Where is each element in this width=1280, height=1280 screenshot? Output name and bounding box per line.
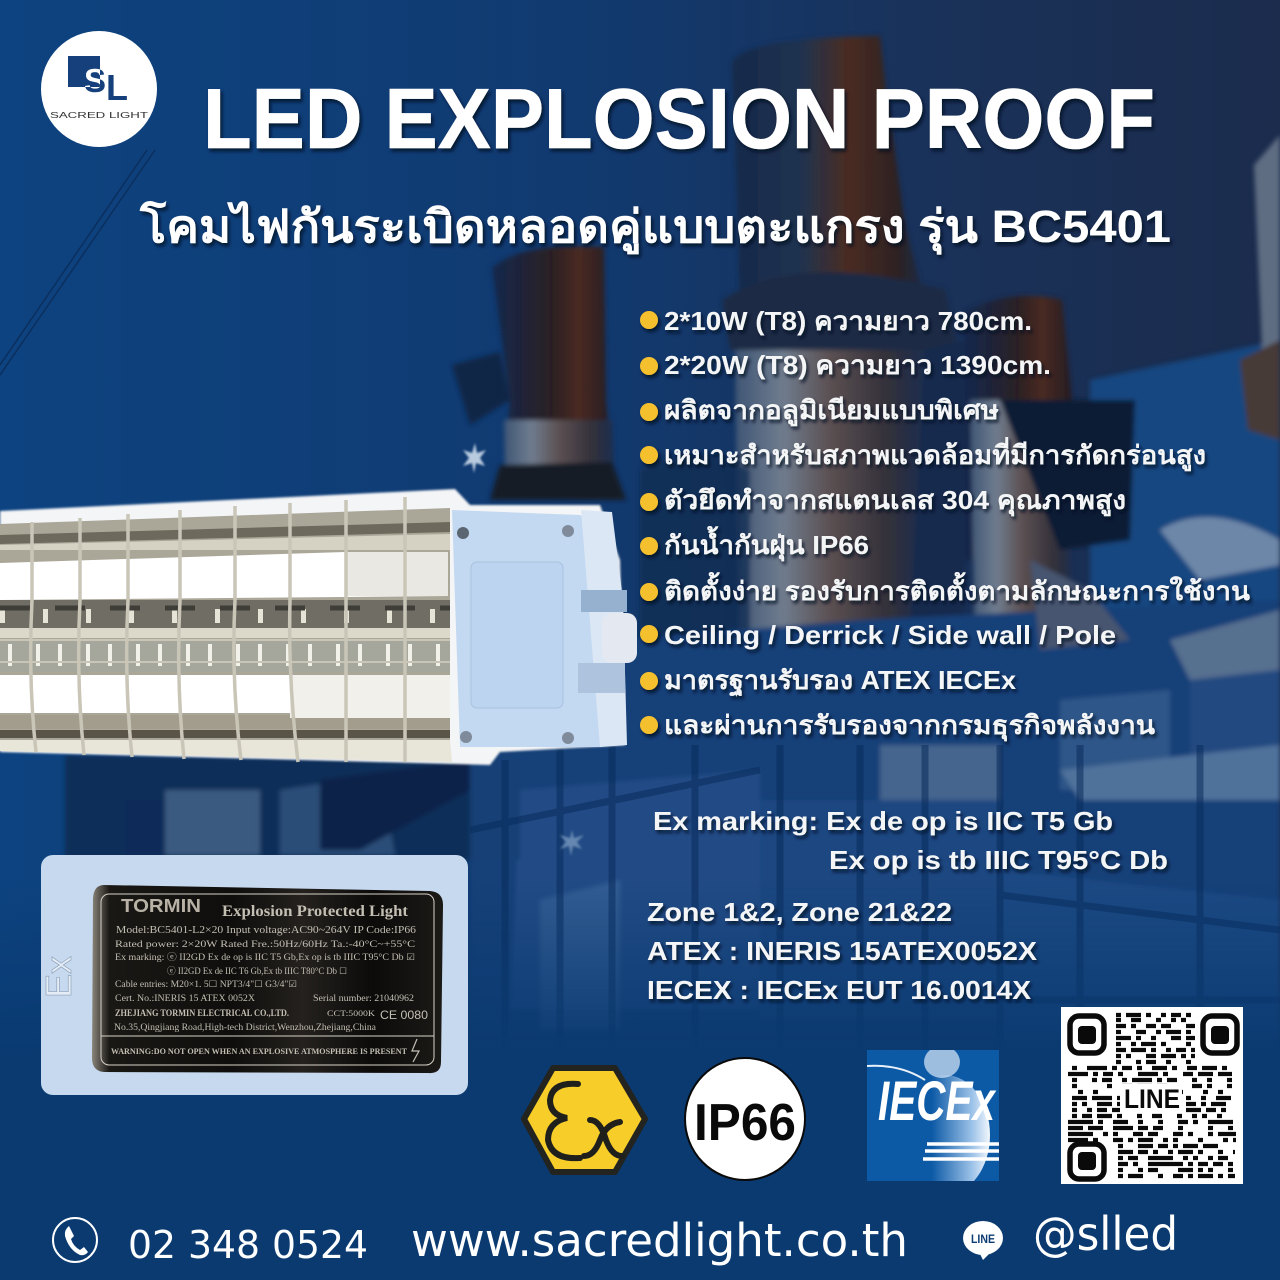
lamp body xyxy=(0,489,625,765)
panel: nameplate photo: Rated power: 2×20W Rated Fre.:50Hz/60Hz Ta.:-40°C~+55°C xyxy=(115,939,415,950)
icon: LINE bubble: LINE xyxy=(971,1232,995,1246)
certification text block xyxy=(647,897,1038,1005)
panel: nameplate photo: Ex marking: ⓔ II2GD Ex de op is IIC T5 Gb,Ex op is tb IIIC T95°C Db ☑ xyxy=(115,952,415,962)
panel: nameplate photo: Explosion Protected Light xyxy=(222,903,409,920)
bullet row 2: 2*20W (T8) ความยาว 1390cm. xyxy=(664,350,1051,380)
metal plate xyxy=(92,885,443,1073)
panel: nameplate photo: Model:BC5401-L2×20 Input voltage:AC90~264V IP Code:IP66 xyxy=(116,925,416,936)
icon: IECEx logo xyxy=(867,1050,999,1181)
icon: Ex hexagon xyxy=(524,1068,645,1172)
data modules xyxy=(1068,1015,1236,1176)
bullet row 9: มาตรฐานรับรอง ATEX IECEx xyxy=(664,665,1017,698)
panel: nameplate photo: ⓔ II2GD Ex de IIC T6 Gb,Ex tb IIIC T80°C Db ☐ xyxy=(167,966,347,976)
panel: nameplate photo: CE 0080 xyxy=(380,1008,428,1022)
QR code xyxy=(1061,1007,1243,1184)
logo: Sacred Light: L xyxy=(106,67,128,108)
bullet row 4: เหมาะสำหรับสภาพแวดล้อมที่มีการกัดกร่อนสูง xyxy=(664,436,1206,472)
Ex marking text block: Ex marking: Ex de op is IIC T5 Gb xyxy=(653,806,1113,836)
icon: LINE bubble xyxy=(963,1221,1003,1260)
wire guard xyxy=(0,497,450,762)
feature list xyxy=(640,306,1250,742)
logo: Sacred Light: S xyxy=(84,62,106,99)
fluorescent tubes xyxy=(0,552,448,600)
panel: nameplate photo: Cable entries: M20×1. 5☐ NPT3/4"☐ G3/4"☑ xyxy=(115,979,297,989)
certification text block: ATEX : INERIS 15ATEX0052X xyxy=(647,936,1038,966)
finder patterns xyxy=(1070,1016,1104,1053)
bullet row 6 xyxy=(640,525,869,562)
panel: nameplate photo: Serial number: 21040962 xyxy=(313,993,414,1003)
bullet row 10: และผ่านการรับรองจากกรมธุรกิจพลังงาน xyxy=(664,710,1155,742)
icon: IECEx logo: IECEx xyxy=(878,1069,997,1132)
panel: nameplate photo: CCT:5000K xyxy=(327,1009,375,1018)
footer: phone xyxy=(53,1218,368,1267)
bullet row 6: กันน้ำกันฝุ่น IP66 xyxy=(664,525,869,562)
panel: nameplate photo: TORMIN xyxy=(121,896,201,916)
panel: nameplate photo: ZHEJIANG TORMIN ELECTRICAL CO.,LTD. xyxy=(115,1008,289,1018)
panel: nameplate photo: WARNING:DO NOT OPEN WHEN AN EXPLOSIVE ATMOSPHERE IS PRESENT xyxy=(111,1046,407,1056)
subtitle: โคมไฟกันระเบิดหลอดคู่แบบตะแกรง รุ่น BC5401 xyxy=(139,200,1171,255)
bullet row 5: ตัวยึดทำจากสแตนเลส 304 คุณภาพสูง xyxy=(664,485,1126,517)
certification text block: Zone 1&2, Zone 21&22 xyxy=(647,897,952,927)
footer: phone: 02 348 0524 xyxy=(128,1223,368,1267)
panel: nameplate photo: Cert. No.:INERIS 15 ATEX 0052X xyxy=(115,993,256,1003)
bullet row 7: ติดตั้งง่าย รองรับการติดตั้งตามลักษณะการใช้งาน xyxy=(664,571,1250,606)
panel: nameplate photo: Ex xyxy=(38,956,79,998)
panel: lamp product photo xyxy=(0,489,637,765)
junction box xyxy=(452,510,602,747)
QR code: LINE xyxy=(1124,1084,1180,1114)
footer: line id xyxy=(963,1207,1178,1261)
footer: line id: @slled xyxy=(1033,1207,1178,1261)
icon: IP66 badge xyxy=(685,1058,805,1180)
footer: website: www.sacredlight.co.th xyxy=(411,1214,908,1267)
icon: phone xyxy=(53,1218,97,1262)
certification text block: IECEX : IECEx EUT 16.0014X xyxy=(647,975,1032,1005)
Ex marking text block xyxy=(653,806,1168,875)
bullet row 3: ผลิตจากอลูมิเนียมแบบพิเศษ xyxy=(664,395,999,427)
logo: Sacred Light xyxy=(41,31,157,147)
reflector grid xyxy=(0,508,450,740)
icon: IP66 badge: IP66 xyxy=(694,1094,796,1152)
Ex marking text block: Ex op is tb IIIC T95°C Db xyxy=(829,845,1168,875)
title: LED EXPLOSION PROOF xyxy=(203,72,1155,167)
logo: Sacred Light: SACRED LIGHT xyxy=(50,110,148,120)
bullet row 8: Ceiling / Derrick / Side wall / Pole xyxy=(664,620,1116,650)
logo: Sacred Light: S xyxy=(84,62,106,99)
bullet row 1: 2*10W (T8) ความยาว 780cm. xyxy=(664,306,1032,336)
panel: nameplate photo xyxy=(38,855,468,1095)
panel: nameplate photo: No.35,Qingjiang Road,High-tech District,Wenzhou,Zhejiang,China xyxy=(114,1022,376,1032)
